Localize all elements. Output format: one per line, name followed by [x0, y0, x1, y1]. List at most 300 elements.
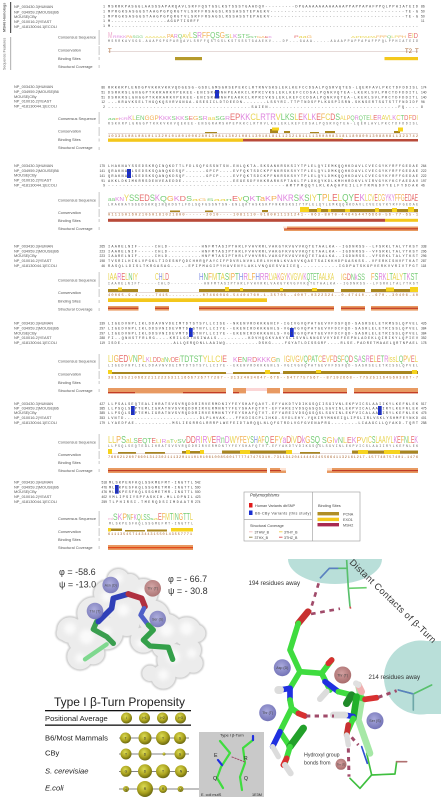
positional average row: i+1 [142, 716, 147, 720]
row labels: Binding Sites [58, 298, 81, 304]
row labels: Consensus Sequence [58, 278, 96, 282]
conservation chart [108, 128, 418, 139]
sequence rows: 401 [421, 416, 427, 420]
label: Distant Contacts of β-Turn: Distant Contacts of β-Turn [348, 557, 438, 645]
residue balls: Ser (S) [152, 617, 163, 621]
positional average row: i+3 [178, 716, 183, 720]
species labels: NP_003430.3|HUMAN [14, 480, 53, 484]
species labels: NP_034959.2|MOUSE|B6 [14, 326, 59, 330]
binding sites [108, 219, 418, 222]
alignment block 7 [14, 480, 201, 550]
sequence rows: LIGEDVNPLIKLDDAVNVDEIMTDTSTSYLLCISE--NKENVRDKKKGNIF-IGIVGVQPATGEVVFDSFQD-SASRSELETRMSSLQPVEL [108, 322, 418, 326]
sequence rows: 86 [421, 4, 425, 8]
sequence rows: 385 [99, 406, 105, 410]
consensus logo: LERAVLKCTDFDI [370, 115, 418, 122]
consensus logo: CHLD [155, 272, 169, 283]
species labels: NP_010016.2|YEAST [14, 415, 52, 420]
angles left: φ = -58.6 [59, 567, 96, 577]
sequence rows: ISDE----------------ALLQERQDNLLAAIWQ----------DSKG----FGYATLDISSGRF----RLSE-PADRETMAAELQRTNPAEL [108, 342, 418, 346]
sequence rows [101, 480, 201, 505]
consensus letters: MSRRKAVSGG-AAAPGPGPARQAVLSRFFQSTGSLKSTSSSTGAAEKV---DP---GAAA-----AAAAPPAPPAPAFPPQLPPHIATEID [108, 39, 418, 43]
sequence rows: 426 [421, 322, 427, 326]
sequence rows: 1 [103, 24, 105, 28]
sequence rows: QRAKNAHLSEDSKSQANQKDSQF------GPCP----EVFQKTSDCKPFNKRSKSVYTPLELQYLDMKQQHKDAVLCVECGYKYRFFGEDAE [108, 175, 418, 179]
row: S. cerevisiae: D [144, 770, 147, 774]
label: 194 residues away: 194 residues away [248, 580, 301, 587]
species labels: NP_010016.2|YEAST [14, 98, 52, 104]
sequence rows: 287 [421, 259, 427, 263]
row: S. cerevisiae: T [162, 770, 164, 774]
consensus logo: ST GA E K [250, 35, 272, 39]
sequence rows: 178 [421, 341, 427, 345]
sequence rows: 296 [421, 250, 427, 254]
legend: binding sites: MSH2 [343, 524, 353, 528]
sequence rows: 11 [421, 19, 425, 23]
sequence rows: -----------------------------------------SAIEN-------------------------------------FQ---- [108, 106, 418, 110]
species labels: NP_010016.2|YEAST [14, 494, 52, 499]
row labels: Consensus Sequence [58, 440, 96, 444]
sequence rows: 1 [103, 10, 105, 14]
consensus logo: YSSEDSK [124, 193, 160, 203]
inset: E. coli structure: E [214, 753, 218, 759]
side label: Sequence Features [2, 37, 11, 70]
sequence rows: 500 [195, 490, 201, 494]
sequence rows: 338 [421, 244, 427, 248]
row labels: Consensus Sequence [58, 34, 96, 40]
sequence rows: DSRKRSLGNGGPTKKRARKVPEKEE-ENISRAHNHPEAKKCLRPRIVKSLEKLKEFCCDSALPQNKVQTEA-LKERLSVLPRCTDFDDITL [108, 96, 418, 100]
sequence rows: 140 [421, 90, 427, 94]
binding sites: PCNA and EXO1 [175, 57, 418, 60]
sequence rows: LIGEDVNPLIKLDDSVNIDEVMTDTSTNYLLCIYE--EKENIRDKKKGNLS-VGIVGVQPATGEVVFDCFQD-SASRLELETRISSLQPVEL [108, 328, 418, 332]
conservation track: T [415, 49, 419, 55]
consensus logo: LIGEDVNPL [108, 354, 146, 365]
residue balls right: Thr (T) [262, 711, 273, 715]
row labels: Conservation [58, 290, 81, 295]
note: hydroxyl group [304, 752, 340, 766]
legend: structural coverage: 3THW_B [254, 530, 270, 534]
consensus logo: HNFMTASIPTHRLFHRR [199, 272, 269, 283]
row labels: Binding Sites [58, 460, 81, 465]
row: E.coli: Q [125, 787, 128, 791]
consensus logo: ml [108, 516, 113, 521]
inset: E. coli structure: Q [244, 776, 248, 782]
sequence rows: LHAKNAYSSEDSKRQINQKDTTLFDLSQFGSSNTSN-ENLQKTA-SKSANKRSKSIYTPLELQYIEMKQQHKDAVLCVECGYKYRFFGEDAE [108, 165, 418, 169]
species labels: MOUSE|CBy [14, 330, 37, 336]
sequence rows: 91 [101, 179, 105, 183]
consensus logo: KSLEKLKEFCDS [285, 112, 340, 122]
sequence rows: 476 [101, 486, 107, 490]
structural coverage [108, 545, 193, 550]
consensus logo: a G S aa n [192, 197, 232, 202]
row labels: Consensus Sequence [58, 358, 96, 364]
sequence rows: 427 [99, 402, 105, 406]
sequence rows: 352 [421, 336, 427, 340]
consensus logo: IGDNkSS [341, 272, 365, 282]
consensus logo: KLDDaNvDEi [146, 357, 180, 364]
legend: structural coverage: 3THY_B [284, 530, 298, 534]
conservation chart: 01115016021050181021800------2010----1081110-0180011131241--063-8070-446454476660-56-77-65-1 [108, 214, 418, 218]
alignment block 4 [14, 244, 427, 312]
sequence rows: TLPHIRSI-TMERQDSIIMDAATR [109, 501, 194, 505]
row labels [58, 278, 96, 312]
row: S. cerevisiae: G [125, 770, 128, 774]
alignment block 5 [14, 320, 427, 393]
sequence rows: MLSKPESFKQLSSGMETMR-INGTTL [109, 486, 193, 490]
hydrogen bonds [306, 691, 397, 777]
row bars [98, 30, 100, 68]
conservation chart: 38133521066221122253111666726777287--31324034647-676--6477757567--87192668--7752511645603867-7 [108, 376, 418, 380]
sequence rows: 265 [99, 244, 105, 248]
consensus logo: FSRKLTALYTKST [371, 272, 418, 283]
species labels: NP_010016.2|YEAST [14, 178, 52, 182]
row labels: Conservation [58, 529, 81, 534]
row labels [58, 358, 96, 393]
consensus logo: KK SKK SE [163, 116, 194, 122]
sequence rows: LYAEDFAE-----------MSLIEGRRGLRRRPLWEFEIDTARQQLNLQFGTRDLVGFGVENAPRG--------LCAAGCLLQYAKD-TQRT [108, 422, 419, 426]
consensus logo [108, 272, 418, 283]
sequence rows: 288 [99, 336, 105, 340]
ribbon [85, 594, 173, 659]
sequence rows: M----------------------------------------------------------------------------------------- [108, 25, 418, 29]
consensus logo: G SR aa SG R [193, 116, 231, 122]
consensus logo: SASRELETRissLQPVEL [354, 354, 418, 364]
row bars [98, 192, 100, 230]
consensus logo: M [108, 31, 113, 40]
angles right: ψ = - 30.8 [168, 586, 208, 596]
angles left: ψ = -13.0 [59, 580, 96, 590]
sequence rows: 8 [421, 105, 423, 109]
species labels: NP_003430.3|HUMAN [14, 4, 53, 9]
row bars [98, 434, 100, 472]
row: S. cerevisiae: S. cerevisiae [45, 766, 88, 776]
species labels [14, 244, 59, 268]
row: CBy: S [179, 752, 182, 756]
species labels: NP_418130044.1|ECOLI [14, 499, 57, 504]
sequence rows: 476 [101, 490, 107, 494]
backbone sticks [273, 612, 377, 773]
row: B6/Most Mammals: S [179, 736, 182, 740]
sequence rows: 86 [101, 86, 105, 90]
distal tip [356, 683, 358, 685]
sequence rows [99, 244, 427, 269]
sequence rows: 296 [421, 254, 427, 258]
row labels: Conservation [58, 128, 81, 134]
row labels: Structural Coverage [58, 468, 93, 473]
sequence rows: 51 [101, 96, 105, 100]
consensus letters: MLSKPESFKQLSSGMEFMT-INGTTL [109, 522, 193, 526]
legend: polymorphisms [249, 492, 312, 516]
consensus letters: LLPSQLSEQTEALIHRATSVSVRQDDRIRVERMDNTYFEYSHAFQTVT-EFYAKDTVDIKGSQSLSGVINLEKPVICSLAAIIRYLKEFNLEK [108, 444, 418, 448]
beta-turn stick model [273, 612, 432, 788]
sequence rows: 118 [421, 264, 426, 268]
inset: E. coli structure: Q [213, 776, 217, 782]
sequence rows: IAARELNIF-----CHLD----------HNFMTASIPTHRLFVHVRRLVAKGYKVGVVKQTETAALKA--IGDNRSS--LFSRKLTALYTKST [108, 246, 419, 250]
consensus logo: PARQAV [167, 34, 190, 40]
sequence rows: 264 [421, 164, 427, 168]
sequence rows: 222 [421, 174, 427, 178]
consensus logo: SLKSTS [225, 34, 251, 40]
legend: polymorphisms: Polymorphisms [250, 492, 280, 498]
consensus logo: EID [408, 33, 418, 40]
sequence rows: RASQLLDISLTKRGASAG-----EPIPMAGIPYHAVENYLAKLVNQGESVAICEQ-----------IGDPATSKGPVERKVVRIVTPGT [108, 265, 419, 269]
label: 214 residues away: 214 residues away [368, 674, 421, 681]
thin sticks [350, 685, 432, 788]
sequence rows: 274 [195, 500, 201, 504]
legend: binding sites: PCNA [343, 512, 354, 516]
row: CBy: CBy [45, 748, 60, 758]
sequence rows [99, 164, 427, 188]
consensus logo: aa KN [108, 197, 124, 203]
row: B6/Most Mammals: B6/Most Mammals [45, 734, 108, 742]
row labels: Binding Sites [58, 56, 81, 61]
sequence rows: MLSKPESFKQLSSGMETMR-INGTTL [109, 491, 193, 495]
sequence rows: 1 [103, 19, 105, 23]
row: B6/Most Mammals [45, 731, 189, 745]
consensus letters: LRAKNAYSSEDSKRQINQKDSTLFDLSQFGSSNTSN-ENLQKTASKSKPFNKRSKSIYTPLELQYLEMKQQHKDAVLCVECGYKYRFFGEDAE [108, 202, 418, 206]
row: S. cerevisiae: N [180, 770, 183, 774]
sequence rows [103, 4, 425, 29]
consensus logo: KLENGGPK [128, 116, 163, 122]
consensus logo: NKRSKSIY [277, 193, 317, 203]
consensus logo [108, 435, 418, 446]
consensus logo: LSRFFQSG [189, 31, 225, 40]
sequence rows: 51 [101, 90, 105, 94]
sequence rows: 46 [421, 184, 425, 188]
row: E.coli: R [162, 787, 165, 791]
species labels: NP_010016.2|YEAST [14, 19, 52, 24]
species labels: NP_034959.2|MOUSE|B6 [14, 89, 59, 94]
conservation chart [108, 207, 418, 218]
sequence rows: MSRRKPASGGLAASSSAPARQAVLSRFFQSTGSLKSTSSSTGAADQV---------DPGAAAAAAAAAAAAPPAPPAPAFPPQLPPHIATEID [108, 6, 418, 10]
sequence rows: IAARELNIF-----CHLD----------HNFMTASIPTHRLFVHVRRLVAKGFKVGVVKQTETAALKA--IGDNRSS--VFSRKLTALYTKST [108, 255, 419, 259]
title: Type I β-Turn Propensity: Type I β-Turn Propensity [54, 695, 185, 709]
note: hydroxyl group: bonds from [304, 760, 331, 766]
sequence rows: VMLIPSIYSPFASKIH-MLLDPNIL [109, 496, 193, 500]
sequence rows: 297 [99, 326, 105, 330]
sequence rows: 1 [103, 4, 105, 8]
consensus logo: TDTSTYLLCIE [180, 354, 227, 364]
sequence rows: 119 [100, 341, 105, 345]
row labels [58, 116, 96, 150]
sequence rows: 2 [103, 105, 105, 109]
angles left [59, 567, 96, 590]
row: B6/Most Mammals: D [144, 736, 147, 740]
species labels [14, 320, 59, 345]
faded back residue [358, 685, 370, 753]
thin contact sticks top [320, 560, 367, 609]
sequence rows: 50 [421, 14, 425, 18]
sequence rows: LLPSQLSEPTEMLIGRATNVSVRQDDRIRVERMNNTYFEYSHAFQTVT-EFYAREIVDSQGSQSLSGVINLEKPVICALAAIIRYLKEFNLEK [108, 412, 419, 416]
binding sites [108, 298, 267, 302]
consensus logo: IGIVGVQPATCEVFDSFQD [284, 354, 353, 364]
alignment block 3 [14, 163, 427, 231]
sequence rows: TVSRILHIKLVPGKLTIDESNFQDCHHRQFAYCIFPDVRLNVHLERLVHHNLKVAVVKQAETSAIKKHDPGASKSS--VFERKISNVFTKAT [108, 260, 419, 264]
sequence rows: 223 [99, 254, 105, 258]
consensus logo: EFMTINGTTL [158, 512, 193, 523]
sequence rows: MPRGKSASGGSTAAGPGPQRGTVLSRFFRSAGSLRSSASSTEPAEKV---------------------------------------TE-G [108, 10, 418, 14]
row labels: Binding Sites [58, 137, 81, 142]
sequence rows: 179 [99, 421, 105, 425]
sequence rows [99, 402, 427, 426]
sequence rows: AKKLDKIMKRRSDENVEAEDDE---------------EEGESDFVKKRARKSPTAKLTPLDKQYKDLKMHHRDKVLVIRVGYKYKCFAEDAV [108, 180, 419, 184]
consensus logo: P aa G [294, 34, 312, 39]
side label: MSH6 Homologs [2, 2, 11, 33]
sequence rows: 385 [99, 411, 105, 415]
conservation track [108, 49, 419, 55]
conservation chart [108, 287, 418, 298]
conservation chart: 40065-9-4-----7415----------07466096-54404760-1-35705--4007-0322324--0-47410---670--30406-40 [108, 294, 418, 298]
species labels: NP_034959.2|MOUSE|B6 [14, 10, 59, 14]
sequence rows: 140 [421, 96, 427, 100]
row labels: Binding Sites [58, 380, 81, 385]
species labels: NP_418130044.1|ECOLI [14, 263, 57, 268]
species labels: MOUSE|CBy [14, 14, 37, 19]
consensus logo: SGIvNLEKPVI [322, 436, 368, 445]
consensus logo: FPP Q LP PH [376, 35, 407, 39]
inset: E. coli structure: Type I β-Turn [220, 732, 244, 738]
consensus logo: IAARELNIY [108, 272, 138, 283]
conservation chart: 103331081081011320101801006280130811302108113018181112321811113008083181180800130880811323742 [108, 135, 418, 139]
molecular surface with ribbon [56, 568, 206, 689]
species labels: NP_010016.2|YEAST [14, 335, 52, 340]
residue balls right: Thr (T) [337, 762, 345, 766]
sequence rows: 141 [99, 169, 105, 173]
sequence rows: DSRKRSLGNGGPTKKRARKVPEKEE-ENISRAHNHPEAKKCLRPRIVKSLEKLKEFCCDSALPQNKVQTEA-LKERLSVLPRCTDFDDITL [108, 92, 418, 96]
consensus logo: APPAPA [351, 35, 376, 39]
sequence rows: 517 [421, 402, 427, 406]
species labels: NP_003430.3|HUMAN [14, 163, 53, 168]
row labels: Conservation [58, 48, 81, 52]
binding sites [108, 138, 418, 142]
residue balls [87, 577, 166, 627]
sequence rows: 9 [103, 184, 105, 188]
row labels: Conservation [58, 452, 81, 457]
alignment block 6 [14, 401, 427, 473]
species labels [14, 401, 59, 425]
sequence rows: 402 [101, 495, 107, 499]
row: E.coli [45, 781, 200, 797]
species labels: MOUSE|CBy [14, 172, 37, 178]
row labels: Binding Sites [58, 218, 81, 223]
inset: E. coli structure: E. coli mutS [201, 793, 222, 797]
species labels: MOUSE|CBy [14, 489, 37, 494]
sequence rows: 542 [195, 480, 201, 484]
species labels: NP_034959.2|MOUSE|B6 [14, 484, 59, 490]
species labels [14, 163, 59, 188]
consensus letters: LIGEDVNPLIKLDDAVNVDEIMTDTSTSYLLCIYE--EKENVRDKKKGNLS-VGIVGVQPATGEVVFDSFQD-SASRSELETRISSLQPVEL [108, 364, 418, 368]
sequence rows: M-----------------AGGPTISRFF [108, 20, 199, 24]
legend box [244, 492, 360, 541]
consensus logo: ALPQRQTE [340, 116, 370, 122]
consensus logo: LVAKGYKVGVVKQTETAALKA [269, 272, 334, 283]
consensus logo: KENRDKKKGn [233, 357, 280, 364]
consensus logo: EPKKCLRTRVL [230, 112, 285, 122]
sequence rows: IAARELNIF-----CHLD----------HNFMTASIPTHRLFVHVRRLVAKGFKVGVVKQTETAALKA--IGDNRSS--VFSRKLTALYTKST [108, 250, 419, 254]
conservation chart: 7666212607660131230211132011101010610085601777747475310-7311312041444624556641132161217-157748757401-1476 [108, 456, 418, 460]
sequence rows: 223 [99, 250, 105, 254]
row labels: Consensus Sequence [58, 198, 96, 202]
row labels: Conservation [58, 372, 81, 376]
structural coverage [108, 306, 418, 311]
sequence rows: LVNTD-----------------------DLPLHVAK---FFKDISCPLIHKD-SYDLEHY-YQKIRYMNKEIQLIPSLIRLVSKLYSHMFEYNKD [108, 417, 418, 421]
row: B6/Most Mammals: T [124, 736, 127, 740]
positional average row [45, 712, 186, 724]
residue balls right [259, 659, 384, 770]
sequence rows: 96 [421, 100, 425, 104]
consensus logo: LLPS [108, 435, 126, 446]
sequence rows: 258 [421, 421, 427, 425]
row labels [58, 198, 96, 231]
row labels: Binding Sites [58, 537, 81, 542]
residue balls: Asn (D) [105, 583, 117, 587]
species labels: NP_003430.3|HUMAN [14, 320, 53, 326]
structural coverage [108, 388, 418, 393]
species labels: NP_034959.2|MOUSE|B6 [14, 406, 59, 410]
note: hydroxyl group: Hydroxyl group [304, 752, 340, 758]
row labels: Structural Coverage [58, 388, 93, 393]
sequence rows: 12 [101, 100, 105, 104]
row labels: Consensus Sequence [58, 116, 96, 121]
sequence rows: MPRGKSASGGSTAAGPGPQRGTVLSRFFRSAGSLRSSASSTEPAEKV---------------------------------------TE-G [108, 16, 418, 20]
consensus logo [108, 31, 418, 40]
side label: MSH6 Homologs: MSH6 Homologs [2, 3, 6, 32]
legend: polymorphisms: Human Variants dbSNP [255, 504, 295, 508]
species labels: NP_010016.2|YEAST [14, 258, 52, 263]
sequence rows: 174 [421, 86, 427, 90]
legend: structural coverage: Structural Coverage [250, 524, 284, 528]
species labels [14, 84, 59, 108]
species labels: NP_034959.2|MOUSE|B6 [14, 248, 59, 254]
sequence rows: ---KRAVKSELTHGQKQSVRVGNGA-GSESICLDTDEEDN-------LSSYRI-TTPTNDSFPLKGSPISRN-SKNSERTSGTSTTFNDIDF [108, 101, 418, 105]
legend: polymorphisms: B6-CBy Variants (this study) [255, 512, 312, 516]
angles right [168, 574, 208, 596]
species labels: NP_034959.2|MOUSE|B6 [14, 168, 59, 173]
conservation chart: 6111354571434431550143557771 [108, 533, 192, 537]
sequence rows: 475 [421, 406, 427, 410]
row: S. cerevisiae [45, 764, 189, 778]
consensus logo: YFEYSHAFQ [236, 435, 269, 446]
sequence rows: 46 [101, 264, 105, 268]
sequence rows: 259 [101, 500, 107, 504]
sequence rows: 384 [421, 326, 427, 330]
consensus letters: IAARELNIFT-----CHLD----------HNFMTASIPTHRLFVHVRRLVAKGYKVGVVKQTETAALKA--IGDNRSS--LFSRKLTALYTKST [108, 282, 418, 286]
row bars [98, 511, 100, 549]
consensus logo: NFKQLSS [127, 513, 150, 522]
row labels: Structural Coverage [58, 64, 93, 69]
consensus logo: AAAAAA [145, 36, 167, 39]
species labels: NP_418130044.1|ECOLI [14, 182, 57, 188]
alignment block 1 [14, 4, 425, 69]
legend: binding sites [318, 503, 354, 528]
residue balls: Thr (T) [147, 587, 158, 591]
species labels: NP_003430.3|HUMAN [14, 401, 53, 406]
row bars [98, 354, 100, 392]
consensus logo: aa e KR [108, 116, 128, 121]
legend: structural coverage: 3THX_B [254, 536, 269, 540]
conservation track: T [108, 49, 112, 55]
legend: binding sites: EXO1 [343, 518, 353, 522]
consensus logo: EvQKTaKP [232, 196, 277, 203]
structural coverage [108, 468, 418, 473]
positional average row: Positional Average [45, 714, 108, 723]
consensus logo: SKP [113, 512, 127, 522]
sequence rows: 1 [103, 14, 105, 18]
surface [56, 568, 206, 689]
species labels [14, 480, 59, 504]
consensus logo: DDRIRVERnDW [186, 435, 236, 446]
species labels: NP_418130044.1|ECOLI [14, 24, 57, 29]
species labels [14, 4, 59, 29]
